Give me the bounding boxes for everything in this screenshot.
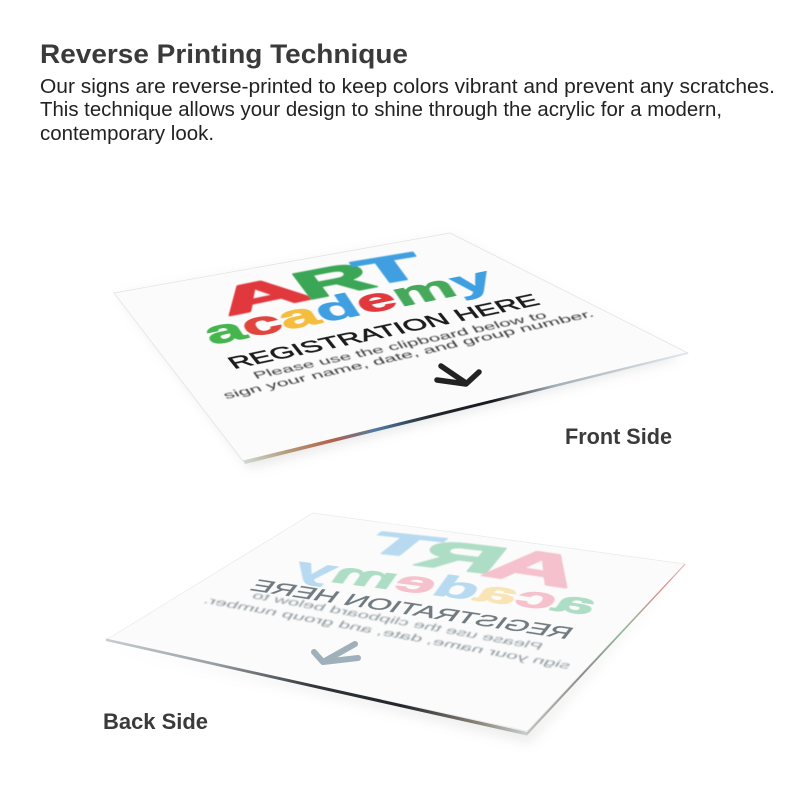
description text: contemporary look. bbox=[40, 123, 214, 145]
front ART logo: T bbox=[344, 245, 435, 293]
front sign panel bbox=[114, 233, 688, 461]
back ART logo, mirrored bbox=[350, 526, 599, 597]
back heading, mirrored: REGISTRATION HERE bbox=[246, 576, 578, 642]
front ART logo: A bbox=[198, 267, 323, 323]
back instruction lines, mirrored: Please use the clipboard below to bbox=[250, 589, 546, 652]
front side acrylic sign bbox=[114, 233, 688, 468]
front instruction lines: Please use the clipboard below to bbox=[250, 309, 549, 381]
back academy logo, mirrored: academy bbox=[285, 551, 607, 621]
front heading: REGISTRATION HERE bbox=[223, 290, 544, 372]
back side acrylic sign bbox=[106, 513, 685, 742]
back ART logo, mirrored: T bbox=[350, 526, 454, 564]
back sign panel bbox=[106, 513, 685, 731]
back sign left edge bbox=[106, 638, 527, 736]
front academy logo: academy bbox=[194, 260, 501, 352]
back ART logo, mirrored: A bbox=[472, 538, 599, 597]
back instruction lines, mirrored bbox=[201, 589, 573, 671]
back instruction lines, mirrored: sign your name, date, and group number. bbox=[201, 595, 573, 671]
front ART logo bbox=[198, 245, 435, 323]
description text: Our signs are reverse-printed to keep colors vibrant and prevent any scratches. bbox=[40, 76, 775, 98]
front ART logo: R bbox=[282, 254, 384, 308]
back sign right edge bbox=[527, 564, 685, 736]
back side label: Back Side bbox=[103, 709, 208, 734]
icon: back arrow bbox=[314, 644, 358, 662]
front instruction lines bbox=[220, 307, 596, 401]
title: Reverse Printing Technique bbox=[40, 39, 408, 69]
back ART logo, mirrored: R bbox=[406, 532, 518, 582]
icon: front arrow bbox=[437, 366, 479, 384]
front sign bottom edge bbox=[243, 352, 688, 464]
description text: This technique allows your design to shine through the acrylic for a modern, bbox=[40, 99, 722, 121]
description text bbox=[40, 76, 775, 145]
front side label: Front Side bbox=[565, 424, 672, 449]
front instruction lines: sign your name, date, and group number. bbox=[220, 307, 596, 401]
